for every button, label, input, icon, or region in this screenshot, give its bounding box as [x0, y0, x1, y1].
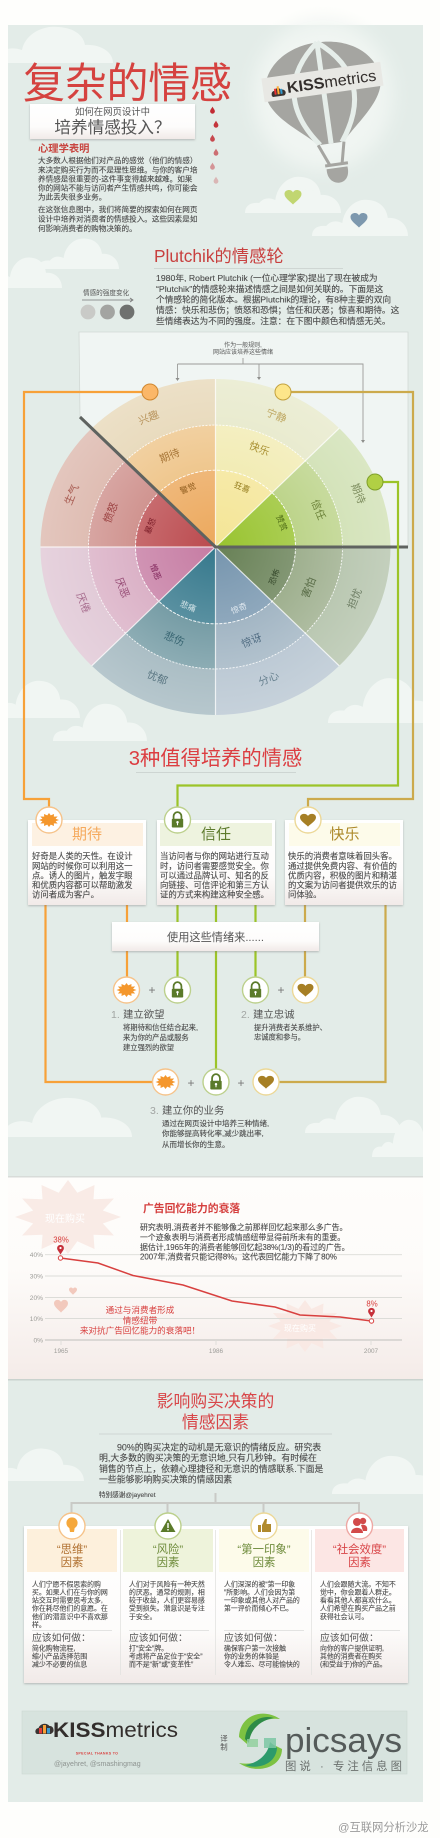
KISSmetrics logo: @jayehret, @smashingmag: [54, 1761, 141, 1768]
factor: first impression: 一印象或其他人对产品的: [224, 1596, 300, 1604]
card: anticipation: 期待: [72, 826, 102, 843]
translated-by label: 制: [220, 1742, 228, 1752]
factor: risk: [123, 1529, 213, 1668]
line chart: 38%: [53, 1236, 69, 1244]
wheel labels: 宁静: [264, 406, 289, 426]
callout: 通过与消费者形成: [106, 1304, 175, 1315]
factor: thinking: 应该如何做：: [32, 1631, 91, 1644]
Plutchik wheel: [4, 344, 427, 750]
wheel labels: 快乐: [247, 440, 272, 459]
wheel labels: 暴怒: [143, 516, 158, 535]
chart grid and axes: 2007: [364, 1348, 379, 1355]
factor: first impression: 人们深深的被“第一印象: [224, 1580, 295, 1588]
KISSmetrics logo: SPECIAL THANKS TO: [76, 1752, 118, 1756]
factor: first impression: 令人难忘、尽可能愉快的: [224, 1660, 300, 1668]
wheel labels: 悲伤: [162, 629, 186, 649]
intro text: 心理学表明: [38, 142, 89, 155]
chart grid and axes: 20%: [30, 1295, 43, 1302]
heading: purchase factors: [99, 1392, 332, 1434]
Plutchik paragraph: 些情绪表达为不同的强度。注意：在下图中颜色和情感无关。: [156, 315, 391, 326]
intro text: 养情感是很重要的-这件事变得越来越难。如果: [38, 174, 193, 184]
wheel labels: 信任: [308, 498, 328, 522]
formula 2: loyalty: [241, 977, 327, 1042]
chart grid and axes: [30, 1252, 402, 1355]
icon: thumbs up: [258, 1519, 271, 1532]
card: trust: 证的方式来构建这种安全感。: [160, 890, 269, 900]
factor: thinking: 站交互时需要思考太多,: [32, 1596, 103, 1604]
card: anticipation: 访问者成为客户。: [32, 890, 99, 900]
heading: Plutchik: Plutchik的情感轮: [154, 246, 284, 266]
wheel labels: 生气: [62, 482, 82, 507]
factor: social validity: “社会效度”: [333, 1542, 386, 1556]
formula 2: loyalty: 2.: [241, 1009, 250, 1021]
panel: four factors: [24, 1526, 408, 1683]
icon: people: [351, 1518, 367, 1533]
factor: first impression: ”所影响。人们会因为第: [224, 1588, 295, 1596]
Plutchik paragraph: [156, 272, 400, 326]
intro text: 在这张信息图中，我们将简要的探索如何在网页: [38, 204, 198, 214]
factor: social validity: 觉中，你会跟着人群走。: [320, 1588, 396, 1596]
subtitle box: [30, 104, 195, 139]
wheel labels: 忧郁: [145, 668, 169, 688]
chart grid and axes: 10%: [30, 1316, 43, 1323]
blood drops: [210, 107, 218, 184]
KISSmetrics logo: KISSmetrics: [53, 1718, 178, 1742]
factors paragraph: 一些能够影响购买决策的情感因素: [99, 1474, 232, 1484]
factor: risk: 打“安全”牌。: [129, 1644, 168, 1652]
icon: lightbulb: [66, 1517, 78, 1532]
card: anticipation: 好奇是人类的天性。在设计: [32, 851, 133, 861]
recall text: 据估计,1965年的消费者能够回忆起38%(1/3)的看过的广告。: [140, 1242, 350, 1252]
translated-by label: [220, 1734, 228, 1752]
factor: first impression: “第一印象”: [237, 1542, 291, 1556]
chart grid and axes: 1965: [54, 1348, 69, 1355]
wheel labels: 期待: [348, 482, 368, 506]
card: trust: 向链接、可信评论和第三方认: [160, 880, 269, 890]
factor: risk: 受到损失。潜意识是专注: [129, 1604, 205, 1612]
formula 1: desire: [111, 977, 198, 1052]
recall text: [140, 1222, 350, 1262]
factor: thinking: 减少不必要的信息: [32, 1660, 87, 1668]
wheel labels: 担忧: [345, 587, 365, 611]
factor: thinking: 你在耗尽他们的意愿。在: [32, 1604, 108, 1612]
wheel labels: 期待: [158, 446, 182, 466]
watermark: @互联网分析沙龙: [338, 1820, 429, 1834]
panel: ad recall decline: [8, 1176, 423, 1380]
formula 3: business: 3.: [150, 1105, 159, 1117]
factors paragraph: 销售的节点上，依赖心理捷径和无意识的情感联系.下面是: [99, 1463, 323, 1474]
formula 3: business: [150, 1069, 279, 1149]
intro text: 大多数人根据他们对产品的感觉（他们的情感）: [38, 155, 197, 165]
wheel labels: 憎恶: [148, 562, 163, 581]
recall text: 2007年,消费者只能记得8%。这代表回忆能力下降了80%: [140, 1252, 337, 1262]
wheel labels: 狂喜: [233, 480, 252, 495]
picsays logo: 图说 · 专注信息图: [285, 1759, 402, 1773]
intro text: 你的网站不能与访问者产生情感共鸣，你可能会: [38, 182, 198, 192]
factor: thinking: 他们的潜意识中不喜欢那: [32, 1612, 108, 1621]
formula 3: business: 通过在网页设计中培养三种情绪,: [162, 1118, 269, 1128]
wheel labels: 惊奇: [229, 601, 248, 616]
factor: risk: 应该如何做：: [129, 1631, 188, 1644]
connector lines below cards: [46, 905, 386, 1082]
card: joy: 通过提供免费内容、有价值的: [288, 861, 397, 871]
factors paragraph: 明,大多数的购买决策的无意识地,只有几秒钟。有时候在: [99, 1452, 317, 1463]
wheel labels: 厌倦: [73, 591, 93, 615]
hot air balloon with KISSmetrics logo: [253, 20, 396, 191]
card: anticipation: 网站的时候你可以利用这一: [32, 861, 133, 871]
factor: social validity: 向你的客户提供证明,: [320, 1644, 384, 1652]
wheel labels: 赞赏: [274, 513, 289, 532]
connector lines from wheel to cards: [24, 392, 413, 812]
card: trust: [157, 820, 275, 905]
note: nurture these emotions: 作为一般规则,: [224, 341, 262, 349]
factor bracket: [72, 1493, 359, 1515]
heading: ad recall: 广告回忆能力的衰落: [143, 1201, 240, 1215]
heading: purchase factors: 影响购买决策的: [157, 1392, 274, 1411]
wheel labels: 惊讶: [240, 631, 264, 651]
formula 1: desire: 1.: [111, 1009, 120, 1021]
icon: warning: [160, 1519, 176, 1532]
cloud hearts: [284, 190, 368, 228]
formula 2: loyalty: +: [277, 983, 285, 997]
intro text: 设计中培养对消费者的情感投入。这些因素是如: [38, 214, 198, 224]
card: trust: 时，访问者需要感觉安全。你: [160, 861, 269, 871]
factor: risk: 因素: [157, 1556, 179, 1569]
wheel labels: 悲痛: [179, 599, 198, 614]
Plutchik paragraph: 1980年, Robert Plutchik (一位心理学家)提出了现在被成为: [156, 272, 378, 283]
factor: risk: 而不是“新”或“变革性”: [129, 1660, 194, 1668]
wheel labels: [62, 406, 368, 689]
panel behind wheel: [79, 332, 408, 547]
factor: social validity: 因素: [348, 1556, 371, 1569]
wheel labels: 害怕: [299, 576, 319, 600]
hot air balloon with KISSmetrics logo: KISSmetrics: [286, 68, 378, 97]
formula 3: business: 你能够提高转化率,减少跳出率,: [162, 1128, 264, 1138]
line chart: 8%: [366, 1300, 378, 1308]
recall text: 一个迹象表明与消费者形成情感纽带显得前所未有的重要。: [140, 1232, 345, 1242]
factor: first impression: 确保客户第一次接触: [224, 1644, 286, 1652]
wheel nodes: [142, 384, 383, 490]
Plutchik paragraph: 情感：快乐和悲伤；愤怒和恐惧；信任和厌恶；惊喜和期待。这: [156, 304, 400, 315]
factor: first impression: 你的业务的体验是: [224, 1652, 279, 1660]
callout: 来对抗广告回忆能力的衰落吧！: [80, 1324, 200, 1336]
factor: risk: 于安全。: [129, 1612, 157, 1621]
card: anticipation: 点。诱人的图片，触发字眼: [32, 870, 133, 880]
wheel labels: 厌恶: [112, 576, 131, 600]
translated-by label: 译: [220, 1734, 228, 1743]
factor: social validity: 获得社会认可。: [320, 1612, 368, 1621]
wheel labels: 愤怒: [101, 500, 121, 525]
factor: thinking: “思维”: [57, 1543, 87, 1556]
picsays logo: [239, 1714, 402, 1773]
intro text: [38, 142, 198, 233]
factor: social validity: (和受益于)你的产品。: [320, 1660, 387, 1668]
factor: thinking: 缩小产品选择范围: [32, 1652, 87, 1660]
note: nurture these emotions: [176, 341, 365, 443]
chart grid and axes: 30%: [30, 1274, 43, 1280]
card: joy: [285, 820, 403, 905]
wheel divider lines: [80, 417, 408, 547]
formula 2: loyalty: 忠诚度和参与。: [254, 1032, 305, 1042]
factor: thinking: 简化购物流程,: [32, 1644, 75, 1652]
formula 1: desire: 将期待和信任结合起来,: [123, 1023, 198, 1032]
line chart: [53, 1236, 378, 1323]
callout: 情感纽带: [123, 1314, 158, 1326]
card: trust: 可以通过品牌认可、知名的反: [160, 870, 269, 880]
card: joy: 问体验。: [288, 890, 322, 900]
legend: intensity: 情感的强度变化: [83, 288, 130, 297]
hearts: [54, 1288, 77, 1313]
banner: use these emotions: 使用这些情绪来......: [167, 930, 264, 944]
card: trust: 信任: [201, 826, 231, 843]
Plutchik paragraph: “Plutchik”的情感轮来描述情感之间是如何关联的。下面是这: [156, 283, 384, 294]
formula 3: business: +: [187, 1076, 195, 1090]
formula 1: desire: +: [148, 983, 156, 997]
heading: purchase factors: 情感因素: [182, 1413, 249, 1432]
card: joy: 优质内容，积极的图片和精湛: [288, 870, 397, 880]
formula 1: desire: 建立强烈的欲望: [123, 1043, 174, 1052]
formula 2: loyalty: 建立忠诚: [253, 1008, 295, 1021]
buy now burst: [15, 1180, 121, 1254]
factor: social validity: 其他的消费者在购买: [320, 1652, 382, 1660]
factor: first impression: [219, 1529, 309, 1668]
card: anticipation: [28, 820, 146, 905]
factor: thinking: 因素: [61, 1556, 83, 1569]
factor: first impression: 应该如何做：: [224, 1631, 283, 1644]
wheel labels: 警觉: [178, 481, 197, 496]
buy now burst: 现在购买: [45, 1212, 85, 1225]
note: nurture these emotions: 网站应该培养这些情绪: [213, 348, 273, 356]
heading: three emotions: 3种值得培养的情感: [129, 747, 302, 770]
Plutchik paragraph: 个情感轮的简化版本。根据Plutchik的理论，有8种主要的双向: [156, 294, 391, 304]
formula 1: desire: 来为你的产品或服务: [123, 1033, 189, 1042]
factor: social validity: 看看其他人都喜欢什么。: [320, 1596, 396, 1604]
factor: thinking: 样。: [32, 1620, 46, 1629]
factor: risk: 考虑将产品定位于“安全”: [129, 1652, 203, 1660]
wheel labels: 分心: [257, 670, 281, 689]
formula 3: business: 从而增长你的生意。: [162, 1139, 230, 1149]
factor: social validity: [315, 1529, 404, 1668]
factor: thinking: 人们宁愿不假思索的购: [32, 1580, 101, 1588]
legend: intensity: [81, 288, 134, 319]
card: joy: 快乐的消费者意味着回头客。: [288, 851, 397, 861]
factors paragraph: [99, 1442, 323, 1499]
callout: [80, 1304, 200, 1336]
banner: use these emotions: [112, 922, 319, 951]
factor: thinking: 买。如果人们在与你的网: [32, 1588, 108, 1596]
factor: risk: 人们对于风险有一种天然: [129, 1580, 205, 1588]
KISSmetrics logo: [35, 1718, 178, 1768]
recall text: 研究表明,消费者并不能够像之前那样回忆起来那么多广告。: [140, 1222, 347, 1232]
factor: risk: 较于收益，人们更容易感: [129, 1596, 205, 1604]
formula 3: business: 建立你的业务: [162, 1104, 224, 1117]
formula 2: loyalty: 提升消费者关系维护、: [254, 1023, 327, 1032]
factor: social validity: 人们希望在购买产品之前: [320, 1604, 396, 1612]
card icons: [36, 807, 321, 833]
wheel labels: 恐怖: [267, 567, 282, 586]
factors paragraph: 特别感谢@jayehret: [99, 1490, 156, 1499]
title: 复杂的情感: [23, 60, 232, 107]
subtitle box: 培养情感投入？: [54, 118, 171, 137]
factor: risk: 的厌恶。通常的规则，相: [129, 1588, 205, 1596]
factor: first impression: 因素: [253, 1556, 275, 1569]
factor: risk: “风险”: [153, 1542, 183, 1556]
wheel labels: 兴趣: [137, 408, 161, 428]
factor: first impression: 第一评价而倾心不已。: [224, 1604, 293, 1612]
buy now burst 2: [268, 1300, 342, 1352]
card: joy: 的文案为访问者提供欢乐的访: [288, 880, 397, 890]
factor: social validity: 应该如何做：: [320, 1631, 379, 1644]
chart grid and axes: 1986: [209, 1348, 224, 1355]
buy now burst 2: 现在购买: [284, 1323, 316, 1333]
formula 3: business: +: [237, 1076, 245, 1090]
card: joy: 快乐: [329, 826, 360, 843]
factor icons: [59, 1513, 372, 1539]
picsays logo: picsays: [285, 1722, 402, 1760]
subtitle box: 如何在网页设计中: [75, 106, 150, 117]
card: anticipation: 和优质内容都可以帮助激发: [32, 880, 133, 890]
footer logo panel: [22, 1711, 407, 1774]
formula 1: desire: 建立欲望: [123, 1008, 165, 1021]
chart grid and axes: 40%: [30, 1252, 43, 1259]
chart grid and axes: 0%: [33, 1338, 43, 1344]
factors paragraph: 90%的购买决定的动机是无意识的情绪反应。研究表: [117, 1442, 321, 1452]
intro text: 来决定购买行为而不是理性思维。与你的客户培: [38, 164, 198, 174]
intro text: 何影响消费者的购物决策的。: [38, 223, 137, 233]
factor: thinking: [27, 1529, 117, 1668]
intro text: 为此丢失很多业务。: [38, 192, 106, 202]
factor: social validity: 人们会跟随大流。不知不: [320, 1580, 396, 1588]
card: trust: 当访问者与你的网站进行互动: [160, 851, 269, 861]
